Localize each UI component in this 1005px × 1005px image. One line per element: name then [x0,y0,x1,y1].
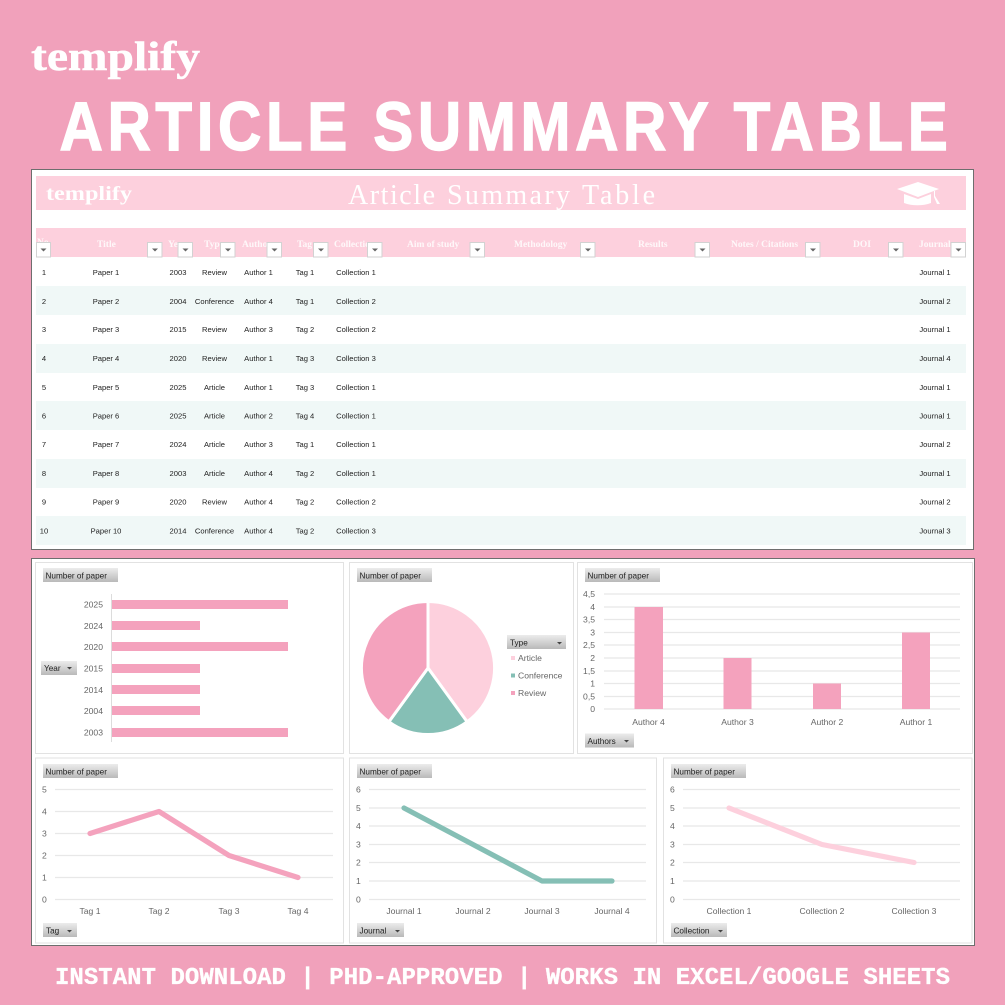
icon: graduation cap [897,182,940,205]
table row 9: Tag 2 [296,498,314,506]
chart: papers by collection: Number of paper [674,768,735,776]
table row 4: Author 1 [244,354,273,363]
table row 9: Paper 9 [93,498,119,506]
chart: papers by journal: Journal 4 [594,906,630,916]
table row 2: 2 [42,297,46,306]
table row 7: 7 [42,440,46,449]
table row 7: Author 3 [244,440,273,449]
main title: ARTICLE SUMMARY TABLE [60,87,948,165]
table row 1: Tag 1 [296,268,314,277]
table row 8 [36,459,966,488]
chart: papers by journal: 3 [356,840,361,850]
table row 3: 2015 [170,325,186,334]
chart: papers by author [578,562,972,754]
chart: papers by author: 3 [590,628,595,638]
table row 6: Paper 6 [93,412,119,420]
chart: papers by journal: 6 [356,784,361,794]
table row 9: Journal 2 [919,498,951,506]
chart: papers by author: 3,5 [583,614,595,624]
chart: papers by collection: Collection 3 [892,906,937,916]
table row 3: 3 [42,325,46,334]
table header row: Type [204,240,224,250]
table row 6: Author 2 [244,412,273,420]
table row 7: Journal 2 [919,440,951,449]
chart: papers by year: 2015 [84,664,103,674]
table row 6: Article [204,412,225,420]
table row 10: Paper 10 [91,526,121,536]
chart: papers by type [350,562,574,754]
brand logo: templify [31,33,201,79]
chart: papers by collection: 2 [670,858,675,868]
table row 10: Journal 3 [919,526,951,536]
table row 8: Article [204,469,225,478]
chart: papers by journal: Journal 2 [455,906,491,916]
chart: papers by collection: 5 [670,803,675,813]
panel: summary table [32,170,974,550]
table row 7: 2024 [170,440,186,449]
chart: papers by author: Author 3 [721,717,754,727]
table row 3: Author 3 [244,325,273,334]
chart: papers by journal: 1 [356,876,361,886]
table row 2: Paper 2 [93,297,119,306]
chart: papers by journal: Journal 3 [524,906,560,916]
table row 8: Paper 8 [93,469,119,478]
table row 8: Collection 1 [336,469,376,478]
banner title: Summary [447,180,570,211]
chart: papers by author: 1 [590,678,595,688]
table row 9: Collection 2 [336,498,376,506]
table row 9: Author 4 [244,498,273,506]
chart: papers by tag: 3 [42,828,47,838]
table row 4 [36,344,966,373]
chart: papers by year: 2004 [84,706,103,716]
chart: papers by author: Author 1 [900,717,932,727]
chart: papers by author: 0 [590,704,595,714]
table header row: Journal [919,240,951,250]
table row 2: Journal 2 [919,297,951,306]
table row 2: Author 4 [244,297,273,306]
chart: papers by collection: 4 [670,821,675,831]
chart: papers by tag: Tag 3 [218,906,240,916]
table row 9: Review [202,498,227,506]
table row 7: Article [204,440,225,449]
table header row: Author [242,240,272,250]
table row 8: 2003 [170,469,186,478]
chart: papers by journal: 4 [356,821,361,831]
table row 10: 2014 [170,526,186,536]
table row 4: 4 [42,354,46,363]
chart: papers by journal: 5 [356,803,361,813]
table header row: Tag [297,240,312,250]
table row 6: 6 [42,412,46,420]
chart: papers by collection: Collection [674,926,710,936]
banner title: Table [582,180,655,211]
table row 2 [36,286,966,315]
table row 6: Journal 1 [919,412,951,420]
table row 6: Collection 1 [336,412,376,420]
table row 5: Article [204,383,225,392]
chart: papers by journal: Journal [360,926,387,936]
table row 8: Journal 1 [919,469,951,478]
chart: papers by year: 2020 [84,642,103,652]
chart: papers by author: 4,5 [583,589,595,599]
chart: papers by author: Author 2 [811,717,843,727]
chart: papers by journal: 0 [356,894,361,904]
table header row: Year [168,240,188,250]
chart: papers by author: Authors [588,737,616,746]
chart: papers by journal [350,758,656,943]
table row 10: Collection 3 [336,526,376,536]
pie legend: Type [510,638,528,648]
table row 3: Tag 2 [296,325,314,334]
chart: papers by tag: 4 [42,806,47,816]
table header row [36,228,966,257]
table banner [36,176,966,211]
table row 8: Author 4 [244,469,273,478]
table row 6: Tag 4 [296,412,314,420]
table row 3: Paper 3 [93,325,119,334]
table row 3: Collection 2 [336,325,376,334]
table row 5: Author 1 [244,383,273,392]
table row 4: Paper 4 [93,354,119,363]
table row 1: Author 1 [244,268,273,277]
chart: papers by tag: 2 [42,850,47,860]
chart: papers by type: Number of paper [360,572,421,580]
pie legend: Article [518,653,542,663]
filter dropdown buttons [36,242,966,257]
table header row: DOI [853,240,871,250]
table row 3 [42,325,951,334]
chart: papers by collection: 0 [670,894,675,904]
footer tagline: INSTANT DOWNLOAD | PHD-APPROVED | WORKS IN EXCEL/GOOGLE SHEETS [55,965,950,992]
chart: papers by journal: Journal 1 [386,906,422,916]
banner title [348,180,655,211]
chart: papers by collection: Collection 1 [707,906,752,916]
chart: papers by author: 1,5 [583,666,595,676]
chart: papers by collection: Collection 2 [800,906,845,916]
chart: papers by journal: Number of paper [360,768,421,776]
chart: papers by year: Number of paper [46,572,107,580]
table row 5: Tag 3 [296,383,314,392]
table row 5: Collection 1 [336,383,376,392]
table row 10 [36,516,966,545]
table row 5: Journal 1 [919,383,951,392]
table row 6: 2025 [170,412,186,420]
table header row: Title [97,240,116,250]
chart: papers by year: 2025 [84,600,103,610]
table row 2: Conference [195,297,234,306]
chart: papers by year: 2014 [84,685,103,695]
panel: charts dashboard [32,558,974,946]
table row 7: Tag 1 [296,440,314,449]
chart: papers by collection: 3 [670,840,675,850]
table row 1: Paper 1 [93,268,119,277]
table row 5: 5 [42,383,46,392]
table row 5: 2025 [170,383,186,392]
table row 2: Tag 1 [296,297,314,306]
table header row: Aim of study [407,240,460,250]
chart: papers by author: 2 [590,653,595,663]
table row 1: 2003 [170,268,186,277]
chart: papers by year: Year [44,664,61,673]
table row 7: Collection 1 [336,440,376,449]
table row 1: 1 [42,268,46,277]
chart: papers by collection: 6 [670,784,675,794]
table row 6 [36,401,966,430]
table header row: Methodology [514,240,568,250]
chart: papers by author: 4 [590,602,595,612]
table row 9 [42,498,951,506]
table row 2: Collection 2 [336,297,376,306]
banner title: Article [348,180,435,211]
table row 1: Review [202,268,227,277]
table row 10: Conference [195,526,234,536]
table row 2: 2004 [170,297,186,306]
pie legend: Conference [518,670,563,680]
chart: papers by year [36,562,344,754]
chart: papers by year: 2003 [84,728,103,738]
table row 8: Tag 2 [296,469,314,478]
table row 1: Collection 1 [336,268,376,277]
chart: papers by tag: 0 [42,894,47,904]
pie legend [507,635,566,698]
chart: papers by tag: 5 [42,784,47,794]
pie legend: Review [518,688,547,698]
table row 1 [42,268,951,277]
table row 7 [42,440,951,449]
table row 3: Review [202,325,227,334]
chart: papers by author: 2,5 [583,640,595,650]
chart: papers by tag: 1 [42,872,47,882]
table header row: Results [638,240,668,250]
chart: papers by author: Author 4 [632,717,665,727]
table row 4: Review [202,354,227,363]
table row 9: 2020 [170,498,186,506]
chart: papers by tag [36,758,344,943]
table header row: No [37,238,49,248]
table row 1: Journal 1 [919,268,951,277]
chart: papers by collection [664,758,972,943]
table row 8: 8 [42,469,46,478]
table row 5: Paper 5 [93,383,119,392]
table row 5 [42,383,951,392]
table row 4: 2020 [170,354,186,363]
table row 10: 10 [40,526,48,536]
chart: papers by tag: Tag 1 [79,906,101,916]
table banner: templify [46,183,132,205]
table header row: Notes / Citations [731,240,798,250]
chart: papers by year: 2024 [84,621,103,631]
chart: papers by author: Number of paper [588,572,649,580]
chart: papers by collection: 1 [670,876,675,886]
table row 10: Tag 2 [296,526,314,536]
chart: papers by tag: Tag 2 [148,906,170,916]
table header row: Collection [334,240,376,250]
chart: papers by journal: 2 [356,858,361,868]
table row 4: Collection 3 [336,354,376,363]
chart: papers by tag: Tag 4 [287,906,309,916]
table row 4: Tag 3 [296,354,314,363]
chart: papers by tag: Tag [46,926,60,936]
chart: papers by tag: Number of paper [46,768,107,776]
table row 3: Journal 1 [919,325,951,334]
table row 9: 9 [42,498,46,506]
table row 4: Journal 4 [919,354,951,363]
chart: papers by author: 0,5 [583,692,595,702]
table row 10: Author 4 [244,526,273,536]
table row 7: Paper 7 [93,440,119,449]
